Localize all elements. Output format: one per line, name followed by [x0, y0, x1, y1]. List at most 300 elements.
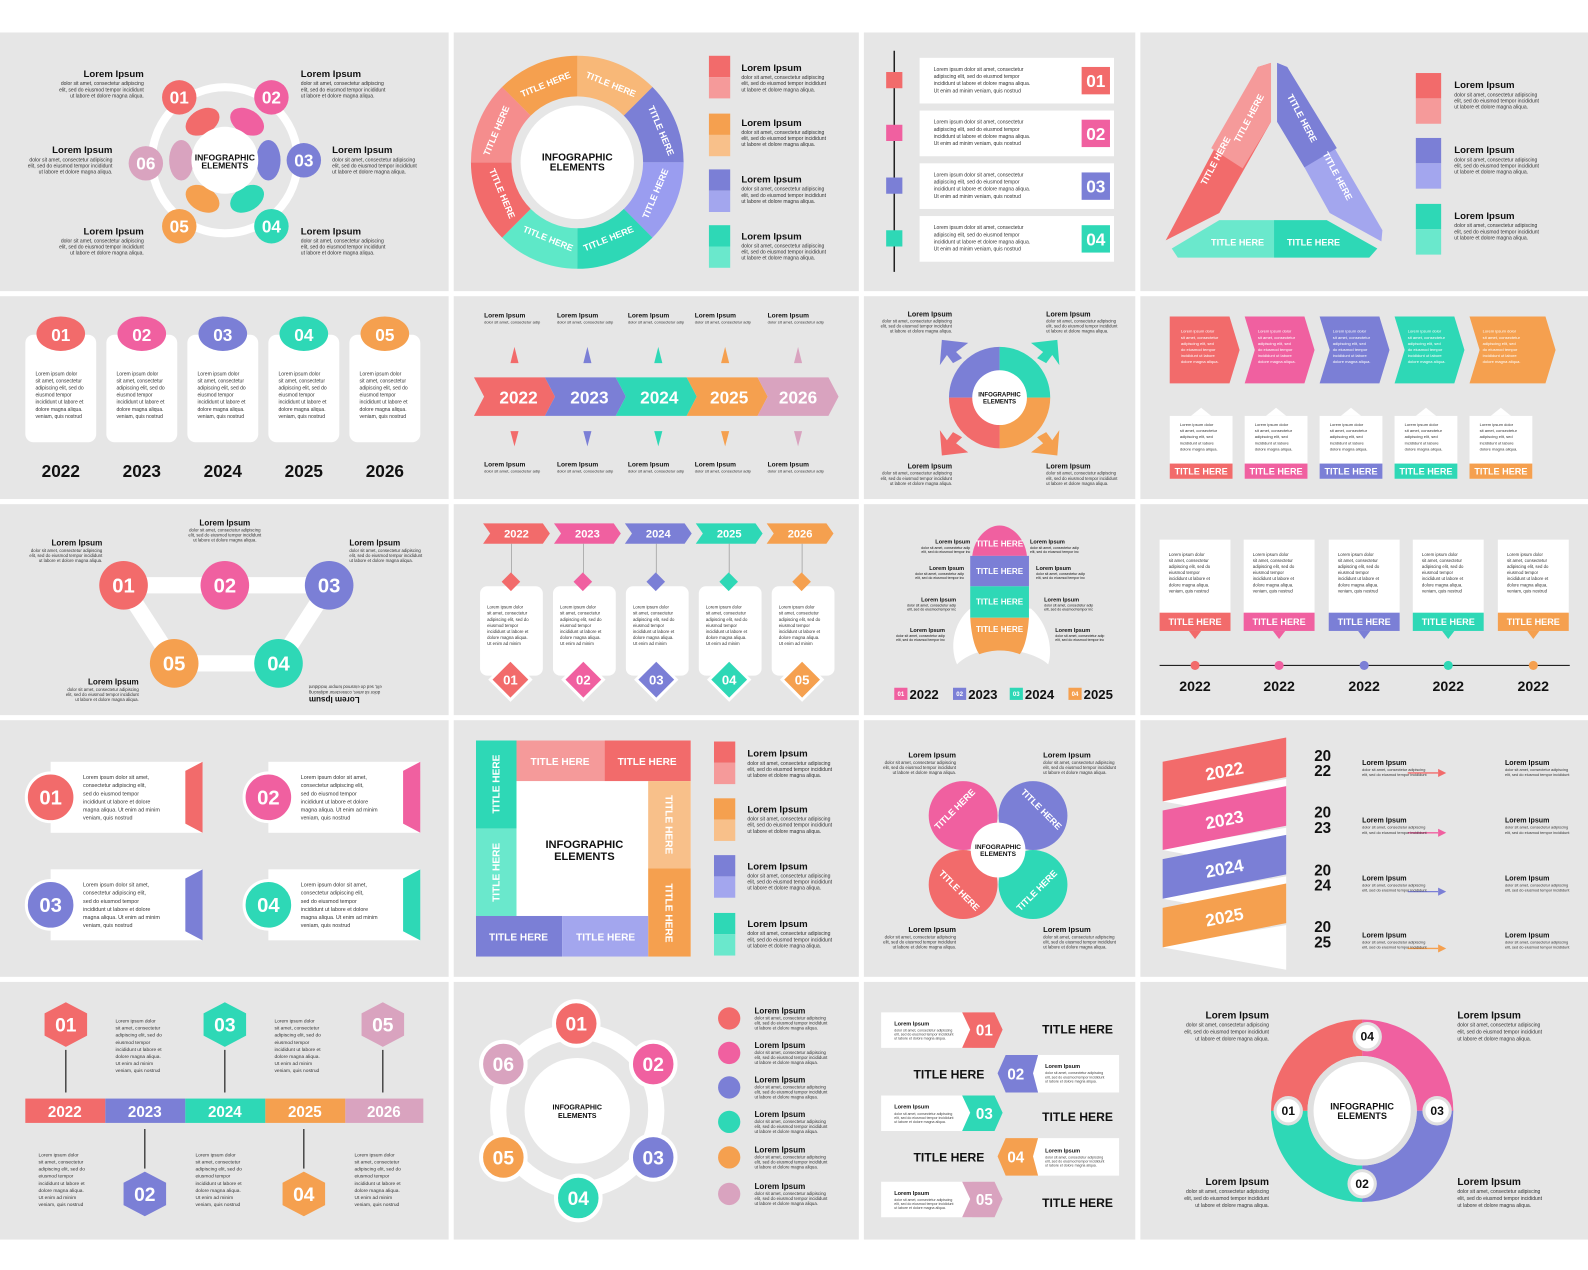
panel: triangle: Lorem Ipsum	[1454, 211, 1515, 222]
panel: year arrow timeline: dolor sit amet, consectetur adip	[695, 320, 752, 325]
panel: year cards: Lorem ipsum dolor	[35, 371, 78, 377]
panel: tag cards with diamonds: 02	[576, 673, 591, 688]
panel: six-circle ring: dolor sit amet, consectetur adipiscing	[755, 1119, 826, 1124]
panel: four-part ring: INFOGRAPHIC	[1330, 1102, 1394, 1112]
panel: six-circle ring: dolor sit amet, consectetur adipiscing	[755, 1191, 826, 1196]
panel: rocket: 04	[1072, 691, 1079, 698]
panel: six-circle ring: ut labore et dolore magna aliqua.	[755, 1095, 818, 1100]
panel: ribbon years: elit, sed do eiusmod tempor incididunt	[1505, 945, 1570, 949]
panel: chevron process cards: Lorem ipsum dolor	[1255, 422, 1289, 427]
panel: segmented donut: TITLE HERE	[487, 167, 517, 220]
panel: chevron process cards: incididunt ut labore	[1405, 440, 1439, 445]
panel: six-circle ring: ut labore et dolore magna aliqua.	[755, 1060, 818, 1065]
panel: connected circles: 04	[267, 653, 290, 676]
panel: tag cards with diamonds: dolore magna aliqua.	[487, 635, 528, 640]
panel: vertical list: Ut enim ad minim veniam, quis nostrud	[934, 141, 1021, 147]
panel: year cards: sit amet, consectetur	[279, 378, 325, 384]
panel: four-petal flower: INFOGRAPHIC	[975, 844, 1021, 851]
panel: year cards: Lorem ipsum dolor	[197, 371, 240, 377]
panel: quadrant circle with arrows: dolor sit amet, consectetur adipiscing	[882, 471, 953, 476]
panel: six-step ring: dolor sit amet, consectetur adipiscing	[332, 157, 415, 163]
panel: hexagon timeline: Ut enim ad minim	[115, 1061, 153, 1067]
panel: four-petal flower: dolor sit amet, consectetur adipiscing	[885, 760, 957, 765]
panel: connected circles: Lorem Ipsum	[349, 539, 400, 548]
panel: rocket: dolor sit amet, consectetur adip	[907, 604, 956, 608]
panel: four-petal flower: elit, sed do eiusmod tempor incididunt	[1043, 939, 1117, 944]
panel: square frame: Lorem Ipsum	[747, 861, 808, 872]
panel: tag cards with diamonds: Lorem ipsum dolor	[779, 605, 815, 610]
panel: ribbon years: 2022	[1204, 758, 1245, 784]
panel: six-step ring: elit, sed do eiusmod tempor incididunt	[301, 245, 386, 251]
panel: ribbon years: Lorem Ipsum	[1505, 817, 1549, 825]
panel: triangle: TITLE HERE	[1287, 237, 1340, 247]
panel: four-part ring: Lorem Ipsum	[1205, 1177, 1269, 1188]
panel: chevron process cards: incididunt ut labore	[1333, 353, 1367, 358]
panel: year cards: Lorem ipsum dolor	[279, 371, 321, 377]
panel: segmented donut: Lorem Ipsum	[741, 118, 802, 129]
panel: zigzag rows: Lorem Ipsum	[894, 1105, 929, 1111]
panel: four-petal flower: Lorem Ipsum	[908, 925, 956, 934]
panel: segmented donut: Lorem Ipsum	[741, 175, 802, 186]
panel: tag cards with diamonds: Ut enim ad minim	[560, 641, 594, 646]
panel: zigzag rows: elit, sed do eiusmod tempor incididunt	[894, 1116, 954, 1120]
panel: tag cards with diamonds: Ut enim ad minim	[779, 641, 813, 646]
panel: hexagon timeline: 04	[293, 1185, 315, 1206]
panel: chevron process cards: Lorem ipsum dolor	[1330, 422, 1364, 427]
panel: chevron process cards: do eiusmod tempor	[1181, 347, 1216, 352]
panel: chevron process cards: adipiscing elit, sed	[1483, 341, 1516, 346]
panel: hexagon timeline: sit amet, consectetur	[115, 1026, 161, 1032]
panel: triangle: TITLE HERE	[1285, 92, 1319, 144]
panel: four numbered boxes: 02	[257, 787, 280, 809]
panel: hexagon timeline: dolore magna aliqua.	[115, 1054, 161, 1060]
panel: four-petal flower: dolor sit amet, consectetur adipiscing	[1043, 760, 1115, 765]
panel: chevron process cards: sit amet, consectetur	[1483, 335, 1521, 340]
panel: segmented donut: dolor sit amet, consectetur adipiscing	[741, 130, 824, 136]
panel: connected circles: 01	[112, 575, 135, 597]
panel: year cards: eiusmod tempor	[360, 393, 396, 399]
panel: cards on timeline: Lorem ipsum dolor	[1507, 552, 1543, 557]
panel: tag cards with diamonds	[480, 523, 835, 700]
panel: six-step ring: Lorem Ipsum	[52, 145, 112, 156]
panel: chevron process cards: sit amet, consectetur	[1181, 335, 1219, 340]
panel: year cards: dolore magna aliqua.	[116, 407, 164, 413]
panel: cards on timeline: 2022	[1179, 679, 1211, 695]
panel: tag cards with diamonds: Lorem ipsum dolor	[560, 605, 597, 610]
panel: zigzag rows: 04	[1007, 1149, 1025, 1166]
panel: chevron process cards: incididunt ut labore	[1258, 353, 1293, 358]
panel: ribbon years: 20	[1314, 862, 1331, 879]
panel: segmented donut: dolor sit amet, consectetur adipiscing	[741, 75, 824, 81]
panel: rocket: 2022	[909, 687, 939, 702]
panel: triangle: TITLE HERE	[1199, 135, 1233, 187]
panel: four-petal flower: dolor sit amet, consectetur adipiscing	[885, 934, 957, 939]
panel: square frame: TITLE HERE	[489, 932, 548, 943]
panel: hexagon timeline: eiusmod tempor	[38, 1174, 74, 1180]
panel: vertical list: incididunt ut labore et dolore magna aliqua.	[934, 239, 1030, 245]
panel: zigzag rows: Lorem Ipsum	[1045, 1148, 1080, 1154]
panel: connected circles: 02	[214, 575, 236, 597]
panel: chevron process cards: Lorem ipsum dolor	[1333, 329, 1367, 334]
panel: year arrow timeline: dolor sit amet, consectetur adip	[484, 469, 541, 474]
panel: ribbon years: dolor sit amet, consectetur adipiscing	[1362, 940, 1425, 944]
panel: six-circle ring: 05	[493, 1148, 514, 1170]
panel: rocket: dolor sit amet, consectetur adip	[921, 546, 970, 550]
panel: zigzag rows: ut labore et dolore magna aliqua.	[894, 1120, 946, 1124]
panel: connected circles: Lorem Ipsum	[309, 695, 360, 704]
panel: ribbon years: dolor sit amet, consectetur adipiscing	[1505, 884, 1568, 888]
panel: six-circle ring: 01	[566, 1015, 587, 1036]
panel: six-circle ring: ut labore et dolore magna aliqua.	[755, 1165, 818, 1170]
panel: quadrant circle with arrows: Lorem Ipsum	[908, 310, 952, 318]
panel: ribbon years: dolor sit amet, consectetur adipiscing	[1362, 884, 1425, 888]
panel: year cards: sit amet, consectetur	[197, 378, 244, 384]
panel: chevron process cards: incididunt ut labore	[1330, 440, 1364, 445]
panel: cards on timeline: sit amet, consectetur	[1169, 558, 1209, 563]
panel: connected circles: Lorem Ipsum	[88, 678, 139, 687]
panel: cards on timeline: dolore magna aliqua.	[1169, 582, 1209, 587]
panel: hexagon timeline: veniam, quis nostrud	[115, 1068, 161, 1074]
panel: four numbered boxes: 01	[39, 787, 62, 809]
panel: zigzag rows: 02	[1007, 1066, 1024, 1083]
panel: square frame: elit, sed do eiusmod tempor incididunt	[747, 880, 833, 886]
panel: year cards	[25, 316, 420, 481]
panel: connected circles: dolor sit amet, consectetur adipiscing	[308, 690, 380, 695]
panel: vertical list: 03	[1086, 177, 1105, 197]
panel: connected circles: dolor sit amet, consectetur adipiscing	[189, 528, 261, 533]
panel: six-circle ring: ut labore et dolore magna aliqua.	[755, 1201, 818, 1206]
panel: rocket: TITLE HERE	[976, 540, 1024, 549]
panel: segmented donut: ut labore et dolore magna aliqua.	[741, 199, 815, 205]
panel: year arrow timeline: Lorem Ipsum	[557, 312, 598, 320]
panel: four-petal flower: dolor sit amet, consectetur adipiscing	[1043, 934, 1115, 939]
panel: six-circle ring: INFOGRAPHIC	[553, 1104, 602, 1112]
panel: year cards: eiusmod tempor	[116, 393, 153, 399]
panel: year arrow timeline: Lorem Ipsum	[628, 312, 669, 320]
panel: vertical list: adipiscing elit, sed do eiusmod tempor	[934, 232, 1020, 238]
panel: connected circles: dolor sit amet, consectetur adipiscing	[349, 548, 421, 553]
panel: quadrant circle with arrows: dolor sit amet, consectetur adipiscing	[1046, 471, 1117, 476]
panel: segmented donut: dolor sit amet, consectetur adipiscing	[741, 244, 824, 250]
panel: cards on timeline: TITLE HERE	[1338, 617, 1391, 627]
panel: tag cards with diamonds: 05	[795, 673, 809, 688]
panel: triangle: dolor sit amet, consectetur adipiscing	[1454, 92, 1537, 98]
panel: chevron process cards: adipiscing elit, sed	[1181, 341, 1214, 346]
panel: four numbered boxes: sed do eiusmod tempor	[83, 899, 139, 905]
panel: hexagon timeline: sit amet, consectetur	[38, 1159, 84, 1165]
panel: four numbered boxes: magna aliqua. Ut enim ad minim	[83, 915, 160, 921]
panel: hexagon timeline: 2024	[208, 1104, 242, 1121]
panel: ribbon years: Lorem Ipsum	[1505, 874, 1549, 882]
panel: hexagon timeline: Lorem ipsum dolor	[354, 1152, 395, 1158]
panel: six-step ring: 03	[294, 150, 313, 170]
panel: six-step ring: elit, sed do eiusmod tempor incididunt	[301, 87, 386, 93]
panel: segmented donut: ELEMENTS	[550, 162, 605, 173]
panel: square frame: ut labore et dolore magna aliqua.	[747, 773, 821, 779]
panel: hexagon timeline: Ut enim ad minim	[274, 1061, 312, 1067]
panel: connected circles: 05	[163, 653, 185, 676]
panel: cards on timeline: eiusmod tempor	[1253, 570, 1284, 575]
panel: vertical list: Ut enim ad minim veniam, quis nostrud	[934, 247, 1021, 253]
panel: cards on timeline: incididunt ut labore et	[1338, 576, 1380, 581]
panel: ribbon years: Lorem Ipsum	[1362, 931, 1407, 939]
panel: ribbon years: elit, sed do eiusmod tempor incididunt	[1505, 773, 1570, 777]
panel: triangle: Lorem Ipsum	[1454, 145, 1515, 156]
panel: chevron process cards: dolore magna aliqua.	[1408, 359, 1446, 364]
panel: hexagon timeline: incididunt ut labore et	[354, 1181, 401, 1187]
panel: four-part ring: elit, sed do eiusmod tempor incididunt	[1184, 1196, 1270, 1202]
panel: four numbered boxes: sed do eiusmod tempor	[83, 791, 139, 797]
panel: six-step ring: dolor sit amet, consectetur adipiscing	[29, 157, 113, 163]
panel: chevron process cards: adipiscing elit, sed	[1255, 434, 1288, 439]
panel: year cards: veniam, quis nostrud	[35, 414, 82, 420]
panel: four numbered boxes: sed do eiusmod tempor	[301, 791, 357, 797]
panel: cards on timeline: dolore magna aliqua.	[1253, 582, 1293, 587]
panel: six-step ring: elit, sed do eiusmod tempor incididunt	[28, 163, 113, 169]
panel: vertical list: incididunt ut labore et dolore magna aliqua.	[934, 81, 1030, 87]
panel: four numbered boxes: veniam, quis nostrud	[83, 923, 132, 929]
panel: four-petal flower: TITLE HERE	[933, 787, 977, 832]
panel: ribbon years: Lorem Ipsum	[1505, 931, 1549, 939]
panel: six-circle ring: elit, sed do eiusmod tempor incididunt	[755, 1196, 828, 1201]
panel: tag cards with diamonds: incididunt ut labore et	[706, 629, 748, 634]
panel: six-step ring: Lorem Ipsum	[84, 69, 144, 80]
panel: rocket: Lorem Ipsum	[929, 566, 964, 572]
panel: four-part ring: 04	[1360, 1030, 1374, 1044]
panel: six-step ring: elit, sed do eiusmod tempor incididunt	[59, 245, 144, 251]
panel: year cards: veniam, quis nostrud	[360, 414, 406, 420]
panel: four-part ring: elit, sed do eiusmod tempor incididunt	[1457, 1196, 1543, 1202]
panel: chevron process cards: sit amet, consectetur	[1180, 428, 1218, 433]
panel: triangle: ut labore et dolore magna aliqua.	[1454, 169, 1528, 175]
panel: square frame: elit, sed do eiusmod tempor incididunt	[747, 937, 833, 943]
panel: ribbon years: dolor sit amet, consectetur adipiscing	[1362, 768, 1425, 772]
panel: square frame: INFOGRAPHIC	[545, 839, 623, 851]
panel: rocket: TITLE HERE	[976, 625, 1024, 634]
panel: six-step ring: elit, sed do eiusmod tempor incididunt	[332, 163, 417, 169]
panel: six-step ring: ut labore et dolore magna aliqua.	[301, 251, 375, 257]
panel: four-part ring: dolor sit amet, consectetur adipiscing	[1186, 1023, 1269, 1029]
panel: vertical list: 01	[1086, 71, 1106, 91]
panel: chevron process cards: Lorem ipsum dolor	[1483, 329, 1517, 334]
panel: chevron process cards: dolore magna aliqua.	[1405, 446, 1442, 451]
panel: square frame: TITLE HERE	[491, 754, 502, 814]
panel: four numbered boxes: 03	[39, 895, 62, 917]
panel: rocket: TITLE HERE	[976, 567, 1024, 576]
panel: cards on timeline: eiusmod tempor	[1169, 570, 1200, 575]
panel: segmented donut: TITLE HERE	[519, 70, 572, 99]
panel: rocket: 2025	[1084, 687, 1113, 702]
panel: zigzag rows: ut labore et dolore magna aliqua.	[894, 1206, 946, 1210]
panel: year arrow timeline: dolor sit amet, consectetur adip	[768, 320, 825, 325]
panel: zigzag rows: Lorem Ipsum	[894, 1191, 929, 1197]
panel: square frame: TITLE HERE	[662, 883, 673, 943]
panel: rocket: elit, sed do eiusmod tempor inc	[1030, 550, 1079, 554]
panel: four-petal flower: ut labore et dolore magna aliqua.	[1043, 770, 1107, 775]
panel: cards on timeline: incididunt ut labore et	[1169, 576, 1211, 581]
panel: four-part ring: 03	[1430, 1104, 1444, 1118]
panel: chevron process cards	[1170, 316, 1556, 479]
panel: square frame: ELEMENTS	[554, 851, 615, 863]
panel: year cards: veniam, quis nostrud	[279, 414, 325, 420]
panel: vertical list: adipiscing elit, sed do eiusmod tempor	[934, 74, 1020, 80]
panel: zigzag rows: elit, sed do eiusmod tempor incididunt	[1045, 1075, 1104, 1079]
panel: quadrant circle with arrows: ut labore et dolore magna aliqua.	[890, 481, 952, 486]
panel: zigzag rows: Lorem Ipsum	[894, 1022, 929, 1028]
panel: ribbon years: dolor sit amet, consectetur adipiscing	[1362, 826, 1425, 830]
panel: square frame: Lorem Ipsum	[747, 749, 808, 760]
panel: tag cards with diamonds: Lorem ipsum dolor	[633, 605, 669, 610]
panel: hexagon timeline: 01	[55, 1016, 77, 1037]
panel: chevron process cards: Lorem ipsum dolor	[1480, 422, 1514, 427]
panel: square frame	[476, 740, 833, 957]
panel: year arrow timeline: Lorem Ipsum	[628, 462, 669, 469]
panel: cards on timeline: veniam, quis nostrud	[1253, 588, 1293, 593]
panel: vertical list: Lorem ipsum dolor sit amet, consectetur	[934, 225, 1024, 231]
panel: four-petal flower	[883, 751, 1117, 949]
panel: year arrow timeline: 2025	[710, 388, 749, 408]
panel: tag cards with diamonds: Lorem ipsum dolor	[706, 605, 742, 610]
panel: six-step ring: ut labore et dolore magna aliqua.	[301, 93, 375, 99]
panel: six-step ring: dolor sit amet, consectetur adipiscing	[301, 238, 384, 244]
panel: hexagon timeline: incididunt ut labore et	[38, 1181, 85, 1187]
panel: segmented donut: ut labore et dolore magna aliqua.	[741, 256, 815, 262]
panel: year arrow timeline: dolor sit amet, consectetur adip	[628, 320, 685, 325]
panel: chevron process cards: dolore magna aliqua.	[1255, 446, 1293, 451]
panel: year arrow timeline: 2023	[570, 388, 609, 408]
panel: chevron process cards: sit amet, consectetur	[1255, 428, 1293, 433]
panel: segmented donut: TITLE HERE	[646, 104, 676, 157]
panel: quadrant circle with arrows: Lorem Ipsum	[1046, 310, 1091, 318]
panel: year arrow timeline: 2026	[779, 388, 817, 408]
panel: year arrow timeline	[474, 312, 839, 474]
panel: hexagon timeline: sit amet, consectetur	[274, 1026, 320, 1032]
panel: cards on timeline: sit amet, consectetur	[1253, 558, 1293, 563]
panel: zigzag rows: elit, sed do eiusmod tempor incididunt	[894, 1202, 954, 1206]
panel: four numbered boxes: Lorem ipsum dolor sit amet,	[301, 883, 367, 889]
panel: quadrant circle with arrows: Lorem Ipsum	[1046, 463, 1091, 471]
panel: hexagon timeline: 05	[372, 1016, 394, 1037]
panel: vertical list: Ut enim ad minim veniam, quis nostrud	[934, 88, 1021, 94]
panel: year cards: 02	[132, 325, 151, 345]
panel: year cards: incididunt ut labore et	[35, 400, 84, 406]
panel: rocket: elit, sed do eiusmod tempor inc	[921, 550, 970, 554]
panel: year cards: incididunt ut labore et	[197, 400, 246, 406]
panel: hexagon timeline: Ut enim ad minim	[195, 1195, 233, 1201]
panel: triangle: dolor sit amet, consectetur adipiscing	[1454, 157, 1537, 163]
panel: zigzag rows: dolor sit amet, consectetur adipiscing	[1045, 1155, 1103, 1159]
panel: ribbon years: dolor sit amet, consectetur adipiscing	[1505, 768, 1568, 772]
panel: four-part ring: ut labore et dolore magna aliqua.	[1195, 1203, 1269, 1209]
panel: year cards: dolore magna aliqua.	[279, 407, 326, 413]
panel: square frame: ut labore et dolore magna aliqua.	[747, 886, 821, 892]
panel: four-petal flower: TITLE HERE	[937, 868, 981, 913]
panel: vertical list: 04	[1086, 229, 1106, 249]
panel: four numbered boxes: 04	[257, 895, 280, 917]
panel: triangle: ut labore et dolore magna aliqua.	[1454, 235, 1528, 241]
panel: chevron process cards: sit amet, consectetur	[1333, 335, 1371, 340]
panel: hexagon timeline: 03	[214, 1016, 236, 1037]
panel: triangle: elit, sed do eiusmod tempor incididunt	[1454, 98, 1540, 104]
panel: ribbon years: elit, sed do eiusmod tempor incididunt	[1362, 773, 1428, 777]
panel: tag cards with diamonds: 2025	[717, 529, 742, 541]
panel: cards on timeline: adipiscing elit, sed do	[1507, 564, 1549, 569]
panel: six-circle ring: elit, sed do eiusmod tempor incididunt	[755, 1055, 828, 1060]
panel: cards on timeline: sit amet, consectetur	[1422, 558, 1463, 563]
panel: rocket: Lorem Ipsum	[935, 540, 970, 546]
panel: chevron process cards: incididunt ut labore	[1483, 353, 1517, 358]
panel: four numbered boxes: sed do eiusmod tempor	[301, 899, 357, 905]
panel: hexagon timeline: eiusmod tempor	[195, 1174, 231, 1180]
panel: four numbered boxes: magna aliqua. Ut enim ad minim	[301, 915, 378, 921]
panel: four-part ring: ut labore et dolore magna aliqua.	[1457, 1037, 1531, 1043]
panel: segmented donut: Lorem Ipsum	[741, 63, 802, 74]
panel: chevron process cards: incididunt ut labore	[1180, 440, 1215, 445]
panel: ribbon years: elit, sed do eiusmod tempor incididunt	[1505, 889, 1570, 893]
panel: connected circles: Lorem Ipsum	[199, 518, 250, 527]
panel: vertical list	[886, 51, 1114, 272]
panel: six-step ring: dolor sit amet, consectetur adipiscing	[61, 238, 144, 244]
panel: four-petal flower: Lorem Ipsum	[1043, 925, 1091, 934]
panel: cards on timeline: TITLE HERE	[1422, 617, 1475, 627]
panel: hexagon timeline: adipiscing elit, sed do	[195, 1167, 242, 1173]
panel: four-part ring: dolor sit amet, consectetur adipiscing	[1457, 1189, 1541, 1195]
panel: tag cards with diamonds: dolore magna aliqua.	[779, 635, 819, 640]
panel: square frame: elit, sed do eiusmod tempor incididunt	[747, 823, 833, 829]
panel: tag cards with diamonds: Ut enim ad minim	[633, 641, 667, 646]
panel: rocket: elit, sed do eiusmod tempor inc	[1036, 576, 1085, 580]
panel: ribbon years: elit, sed do eiusmod tempor incididunt	[1505, 831, 1570, 835]
panel: ribbon years: elit, sed do eiusmod tempor incididunt	[1362, 889, 1428, 893]
panel: hexagon timeline: incididunt ut labore et	[195, 1181, 242, 1187]
panel: connected circles: 03	[318, 575, 340, 597]
panel: hexagon timeline: dolore magna aliqua.	[195, 1188, 241, 1194]
panel: tag cards with diamonds: incididunt ut labore et	[560, 629, 602, 634]
panel: hexagon timeline: 02	[134, 1185, 156, 1206]
panel: square frame: TITLE HERE	[576, 932, 635, 943]
panel: ribbon years: 20	[1314, 919, 1331, 936]
panel: segmented donut: elit, sed do eiusmod tempor incididunt	[741, 193, 827, 199]
panel: cards on timeline	[1160, 540, 1570, 695]
panel: zigzag rows: TITLE HERE	[1042, 1023, 1113, 1037]
panel: segmented donut: dolor sit amet, consectetur adipiscing	[741, 187, 824, 193]
panel: year cards: incididunt ut labore et	[279, 400, 327, 406]
panel: ribbon years: Lorem Ipsum	[1362, 817, 1407, 825]
panel: square frame: dolor sit amet, consectetur adipiscing	[747, 931, 831, 937]
panel: hexagon timeline: Ut enim ad minim	[38, 1195, 76, 1201]
panel: four numbered boxes: Lorem ipsum dolor sit amet,	[83, 775, 149, 781]
panel: four-part ring: Lorem Ipsum	[1205, 1010, 1269, 1021]
panel: cards on timeline: veniam, quis nostrud	[1422, 588, 1463, 593]
panel: year cards: 03	[213, 325, 232, 345]
panel: hexagon timeline: 2022	[48, 1104, 82, 1121]
panel: quadrant circle with arrows: elit, sed do eiusmod tempor incididunt	[1046, 324, 1118, 329]
panel: hexagon timeline: eiusmod tempor	[115, 1040, 151, 1046]
panel: six-circle ring: Lorem Ipsum	[755, 1075, 805, 1084]
panel: segmented donut: elit, sed do eiusmod tempor incididunt	[741, 250, 827, 256]
panel: hexagon timeline: eiusmod tempor	[354, 1174, 390, 1180]
panel: four numbered boxes: veniam, quis nostrud	[83, 816, 132, 822]
panel: zigzag rows: dolor sit amet, consectetur adipiscing	[894, 1029, 952, 1033]
panel: year arrow timeline: Lorem Ipsum	[484, 462, 526, 469]
panel: zigzag rows: 03	[976, 1106, 993, 1123]
panel: year arrow timeline: Lorem Ipsum	[557, 462, 598, 469]
panel: six-circle ring: 06	[493, 1055, 514, 1076]
panel: rocket: dolor sit amet, consectetur adip	[1044, 604, 1093, 608]
panel: quadrant circle with arrows: dolor sit amet, consectetur adipiscing	[882, 319, 953, 324]
panel: hexagon timeline	[25, 1002, 423, 1216]
panel: six-step ring: 01	[170, 87, 189, 107]
